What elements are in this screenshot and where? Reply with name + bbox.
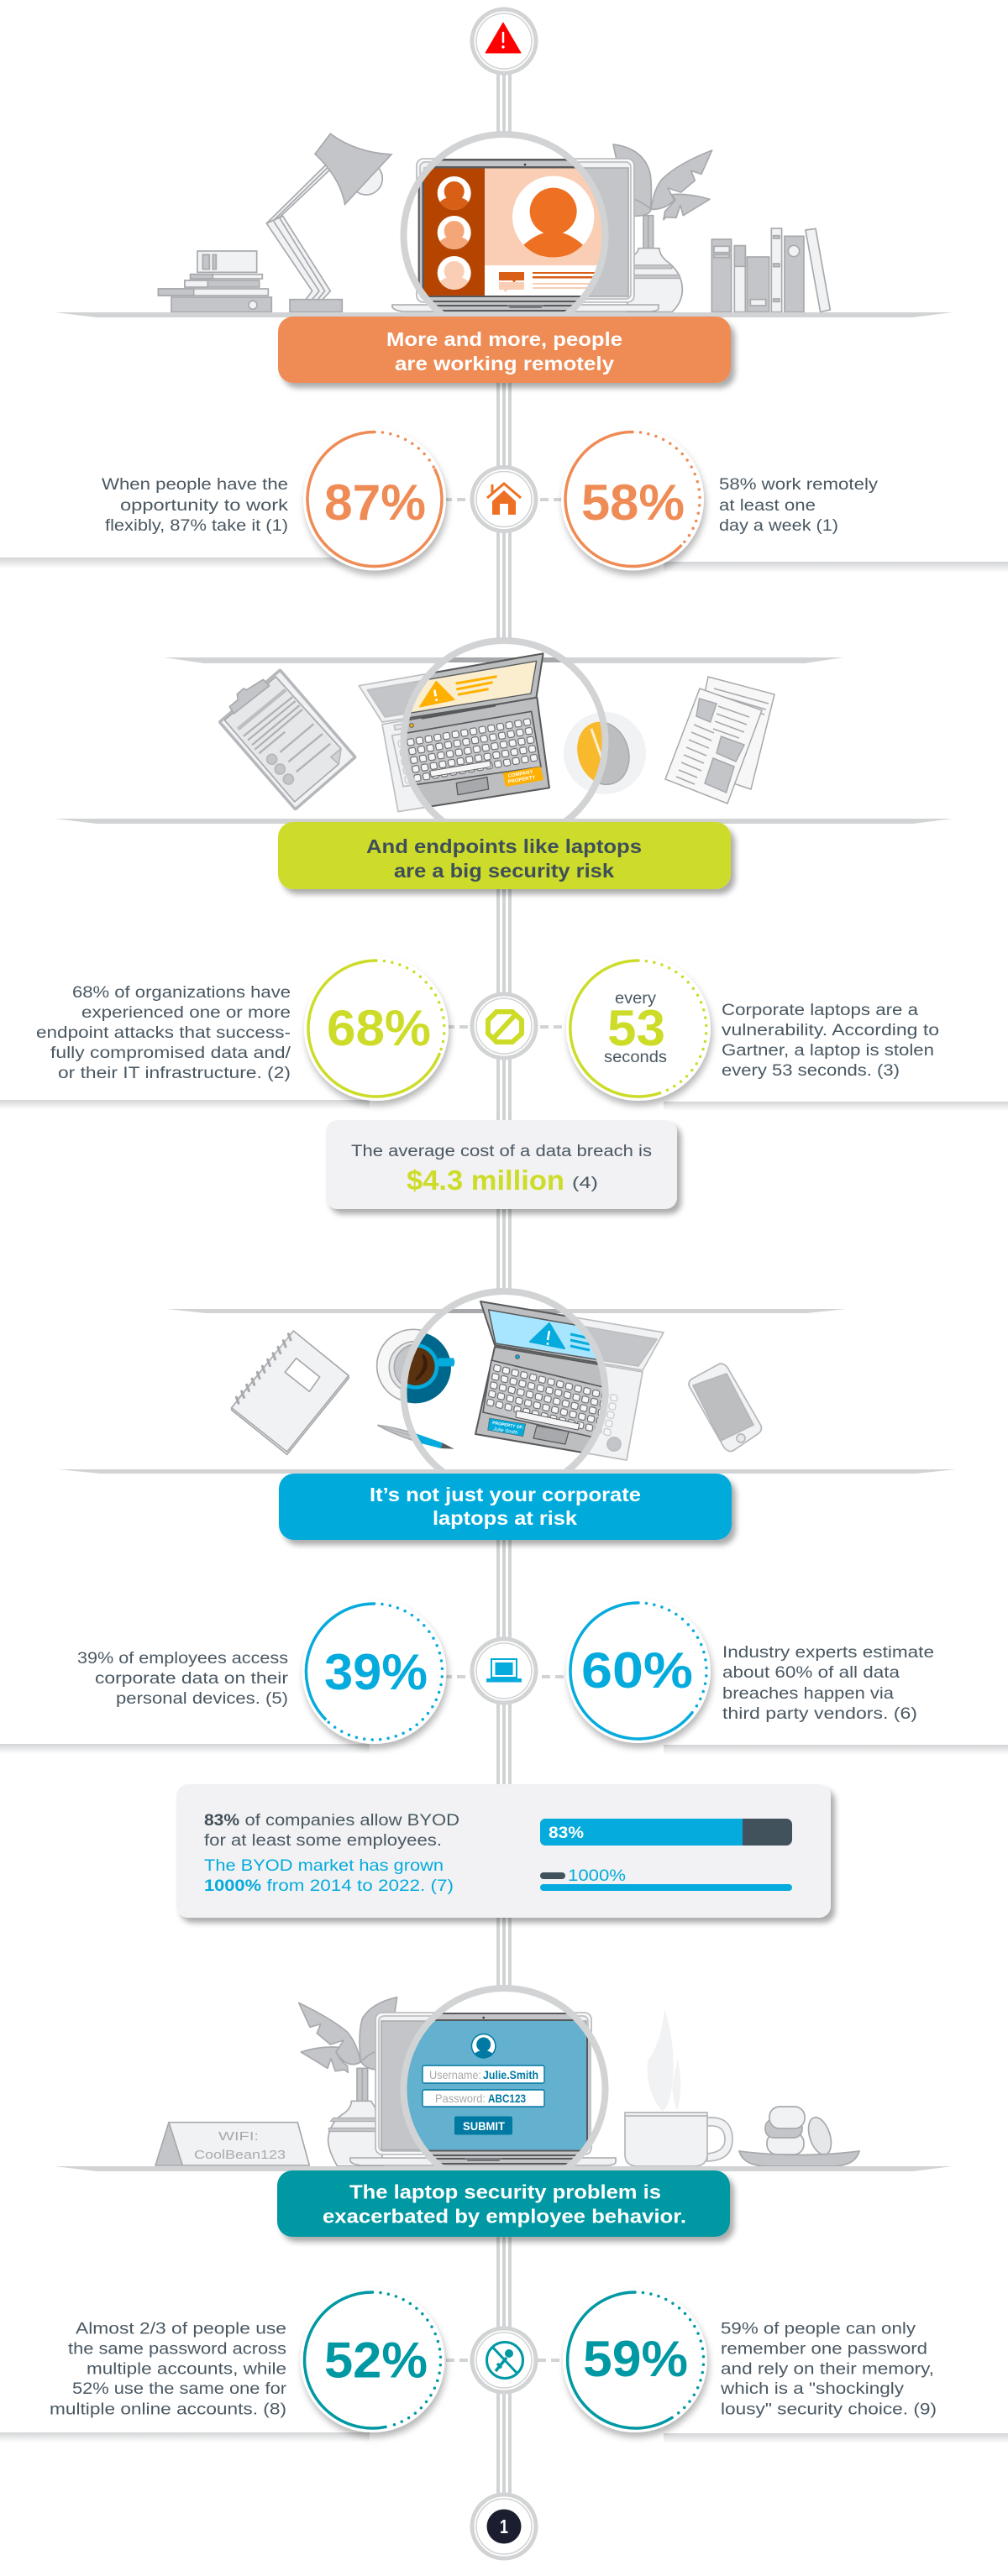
text: endpoint attacks: [36, 984, 291, 1082]
shadow strips: [0, 558, 1008, 573]
panel: password stats: [0, 2288, 1008, 2443]
icon: desk lamp: [266, 134, 391, 312]
icon: steam: [648, 2009, 680, 2111]
icon: prohibited: [472, 994, 536, 1058]
stat ring: 87%: [303, 428, 446, 571]
connector dashes: [444, 498, 563, 501]
heading banner: endpoints: are a big security risk: [394, 860, 614, 882]
stat ring: 59%: 59%: [583, 2331, 688, 2387]
stat ring: every 53 seconds: 53: [607, 1000, 665, 1056]
lens view: video call on laptop: [416, 158, 601, 312]
text: BYOD stats: of companies allow BYOD: [245, 1812, 459, 1830]
icon: numbered end marker: 1: [500, 2516, 508, 2537]
icon: gray open laptop: [475, 1301, 664, 1460]
text: BYOD stats: 1000%: [204, 1877, 261, 1895]
text: endpoint attacks: 68% of organizations have: [72, 984, 291, 1002]
text: BYOD stats: [204, 1812, 459, 1895]
icon: wifi tent card: CoolBean123: [194, 2148, 286, 2162]
text: BYOD stats: from 2014 to 2022. (7): [267, 1877, 454, 1895]
heading banner: not just corporate laptops: It’s not just your corporate: [370, 1484, 641, 1505]
icon: gray mouse on mat: [564, 712, 646, 794]
text: stolen laptops: [722, 1002, 939, 1080]
shadow strips: [0, 2432, 1008, 2443]
card: cost of a data breach: The average cost of a data breach is: [351, 1143, 652, 1160]
stat ring: 60%: [566, 1599, 711, 1743]
text: personal devices: corporate data on their: [95, 1670, 289, 1688]
login field: username: Julie.Smith: [483, 2068, 538, 2081]
text: endpoint attacks: experienced one or more: [81, 1004, 291, 1022]
shadow strips: [0, 1100, 1008, 1111]
stat ring: every 53 seconds: every: [615, 990, 657, 1008]
icon: macarons and bowl: [739, 2107, 859, 2166]
text: one day a week: [719, 476, 879, 535]
text: one remembered password: [720, 2321, 937, 2418]
text: flexible work: [102, 476, 289, 535]
heading banner: remote work: are working remotely: [395, 353, 614, 374]
heading banner: endpoints: [278, 822, 731, 889]
panel: endpoint stats: [0, 956, 1008, 1209]
icon: newspaper: [665, 677, 774, 804]
lower shelf: [55, 819, 953, 824]
text: personal devices: personal devices. (5): [116, 1690, 288, 1708]
heading banner: remote work: More and more, people: [386, 328, 622, 350]
icon: key prohibited: [472, 2328, 536, 2392]
text: reused passwords: multiple accounts, while: [87, 2361, 286, 2378]
icon: wifi tent card: WIFI:: [218, 2129, 259, 2144]
bar: 1000%: 1000%: [568, 1867, 626, 1885]
icon: gray book row: [711, 228, 830, 312]
connector dashes: [444, 1675, 564, 1678]
text: stolen laptops: every 53 seconds. (3): [722, 1062, 900, 1080]
lens view: login screen: [407, 2012, 592, 2166]
text: reused passwords: [50, 2321, 287, 2418]
text: third party vendors: third party vendors. (6): [722, 1705, 917, 1723]
text: personal devices: [77, 1650, 289, 1708]
sticker: property of Julie Smith: PROPERTY OF:: [492, 1421, 524, 1431]
login field: password: ABC123: [488, 2092, 526, 2105]
panel: endpoint scene: [55, 638, 953, 889]
icon: laptop: [472, 1639, 536, 1703]
stat ring: 39%: 39%: [324, 1644, 428, 1700]
text: one remembered password: lousy" security choice. (9): [721, 2401, 937, 2418]
text: reused passwords: multiple online accounts. (8): [50, 2401, 286, 2418]
icon: gray laptop: [350, 2013, 616, 2165]
text: BYOD stats: 83%: [204, 1812, 239, 1830]
stat ring: 68%: [304, 956, 449, 1101]
text: flexible work: flexibly, 87% take it (1): [105, 517, 288, 535]
sticker: company property: COMPANY: [507, 770, 533, 779]
heading banner: employee behavior: The laptop security problem is: [349, 2181, 661, 2203]
stat ring: 58%: [561, 428, 704, 571]
shelf: [55, 2166, 953, 2171]
icon: home: [472, 467, 536, 531]
upper shelf: [167, 1309, 846, 1313]
login field: password: [423, 2090, 544, 2107]
panel: working remotely scene: [55, 126, 953, 383]
icon: notebook: [232, 1331, 349, 1454]
text: stolen laptops: vulnerability. According to: [722, 1022, 939, 1039]
text: endpoint attacks: fully compromised data and/: [50, 1045, 291, 1062]
central spine connector: [496, 71, 512, 2495]
bar: 1000%: [540, 1867, 792, 1891]
stat ring: 68%: 68%: [327, 1000, 431, 1056]
text: stolen laptops: Corporate laptops are a: [722, 1002, 919, 1019]
text: third party vendors: Industry experts estimate: [722, 1644, 934, 1662]
text: reused passwords: the same password across: [68, 2341, 286, 2358]
stat ring: 58%: 58%: [581, 474, 685, 531]
text: BYOD stats: The BYOD market has grown: [204, 1857, 444, 1875]
sticker: company property: PROPERTY: [507, 775, 536, 785]
login field: username: [423, 2066, 544, 2083]
bar: 83%: [540, 1819, 792, 1846]
lower shelf: [58, 1469, 956, 1474]
exclamation mark on warning: [547, 1331, 549, 1345]
icon: warning at top of spine: [472, 9, 536, 73]
panel: personal devices scene: [58, 1289, 956, 1540]
text: flexible work: opportunity to work: [120, 497, 289, 515]
bar: 83%: 83%: [549, 1825, 584, 1842]
icon: gray saucer and pen: [377, 1329, 449, 1441]
magnifying lens ring: [403, 641, 605, 842]
text: one remembered password: 59% of people can only: [721, 2321, 916, 2338]
icon: stacked books: [158, 251, 271, 312]
magnifying lens ring: [403, 1291, 605, 1493]
sticker: property of Julie Smith: [488, 1418, 526, 1437]
connector dashes: [446, 1025, 564, 1029]
text: third party vendors: about 60% of all data: [722, 1664, 900, 1682]
stat ring: 39%: [302, 1600, 447, 1744]
text: endpoint attacks: or their IT infrastructure. (2): [58, 1065, 291, 1082]
stat ring: every 53 seconds: [566, 956, 711, 1101]
stat ring: 87%: 87%: [324, 474, 426, 531]
text: third party vendors: breaches happen via: [722, 1685, 894, 1703]
stat ring: 52%: [301, 2288, 445, 2432]
icon: wifi tent card: [155, 2123, 309, 2165]
text: one remembered password: remember one password: [721, 2341, 927, 2358]
text: reused passwords: Almost 2/3 of people use: [76, 2321, 286, 2338]
text: reused passwords: 52% use the same one for: [72, 2380, 287, 2398]
icon: clipboard: [221, 671, 354, 809]
upper shelf: [164, 657, 843, 663]
sticker: company property: [502, 767, 543, 787]
text: stolen laptops: Gartner, a laptop is stolen: [722, 1042, 934, 1060]
icon: gray laptop: [392, 159, 659, 312]
magnifying lens ring: [403, 134, 605, 336]
connector dashes: [446, 2359, 561, 2362]
card: cost of a data breach: (4): [572, 1175, 598, 1192]
text: BYOD stats: for at least some employees.: [204, 1832, 442, 1850]
stat ring: every 53 seconds: seconds: [604, 1049, 667, 1066]
icon: plant and vase: [613, 144, 712, 312]
stat ring: 52%: 52%: [324, 2333, 428, 2388]
text: endpoint attacks: endpoint attacks that success-: [36, 1024, 291, 1042]
login field: username: Username:: [429, 2068, 481, 2081]
panel: personal device stats: [0, 1599, 1008, 1918]
heading banner: not just corporate laptops: laptops at risk: [433, 1507, 577, 1529]
login field: password: Password:: [435, 2092, 486, 2105]
heading banner: endpoints: And endpoints like laptops: [366, 835, 642, 857]
text: flexible work: When people have the: [102, 476, 288, 494]
text: third party vendors: [722, 1644, 934, 1723]
heading banner: employee behavior: exacerbated by employee behavior.: [323, 2205, 686, 2227]
icon: mug: [625, 2113, 732, 2166]
text: personal devices: 39% of employees access: [77, 1650, 288, 1668]
heading banner: remote work: [278, 317, 731, 383]
sticker: property of Julie Smith: Julie Smith: [492, 1427, 518, 1436]
card: cost of a data breach: [326, 1120, 677, 1209]
shadow strips: [0, 1744, 1008, 1755]
submit button: [454, 2116, 512, 2134]
text: one remembered password: which is a "shockingly: [720, 2380, 905, 2398]
text: one day a week: at least one: [719, 497, 816, 515]
icon: gray open laptop: [359, 653, 549, 812]
shelf: [55, 312, 953, 317]
icon: phone: [689, 1364, 761, 1451]
heading banner: employee behavior: [277, 2170, 730, 2237]
stat ring: 59%: [563, 2288, 707, 2432]
magnifying lens ring: [403, 1988, 605, 2190]
icon: numbered end marker: [472, 2495, 536, 2558]
stat ring: 60%: 60%: [581, 1642, 693, 1699]
yellow mouse: [577, 722, 601, 781]
text: one day a week: 58% work remotely: [719, 476, 879, 494]
panel: employee behavior scene: [55, 1986, 953, 2237]
card: cost of a data breach: $4.3 million: [407, 1165, 564, 1196]
heading banner: not just corporate laptops: [279, 1474, 732, 1540]
lens view: coffee, pen and personal laptop: [407, 1301, 601, 1453]
text: one day a week: day a week (1): [719, 517, 838, 535]
card: BYOD: [176, 1784, 831, 1918]
lens view: company laptop with warning: [407, 652, 601, 808]
panel: remote work stats: [0, 428, 1008, 573]
text: one remembered password: and rely on their memory,: [721, 2361, 934, 2378]
icon: plant and vase: [299, 1997, 397, 2166]
submit button: SUBMIT: [463, 2119, 505, 2133]
